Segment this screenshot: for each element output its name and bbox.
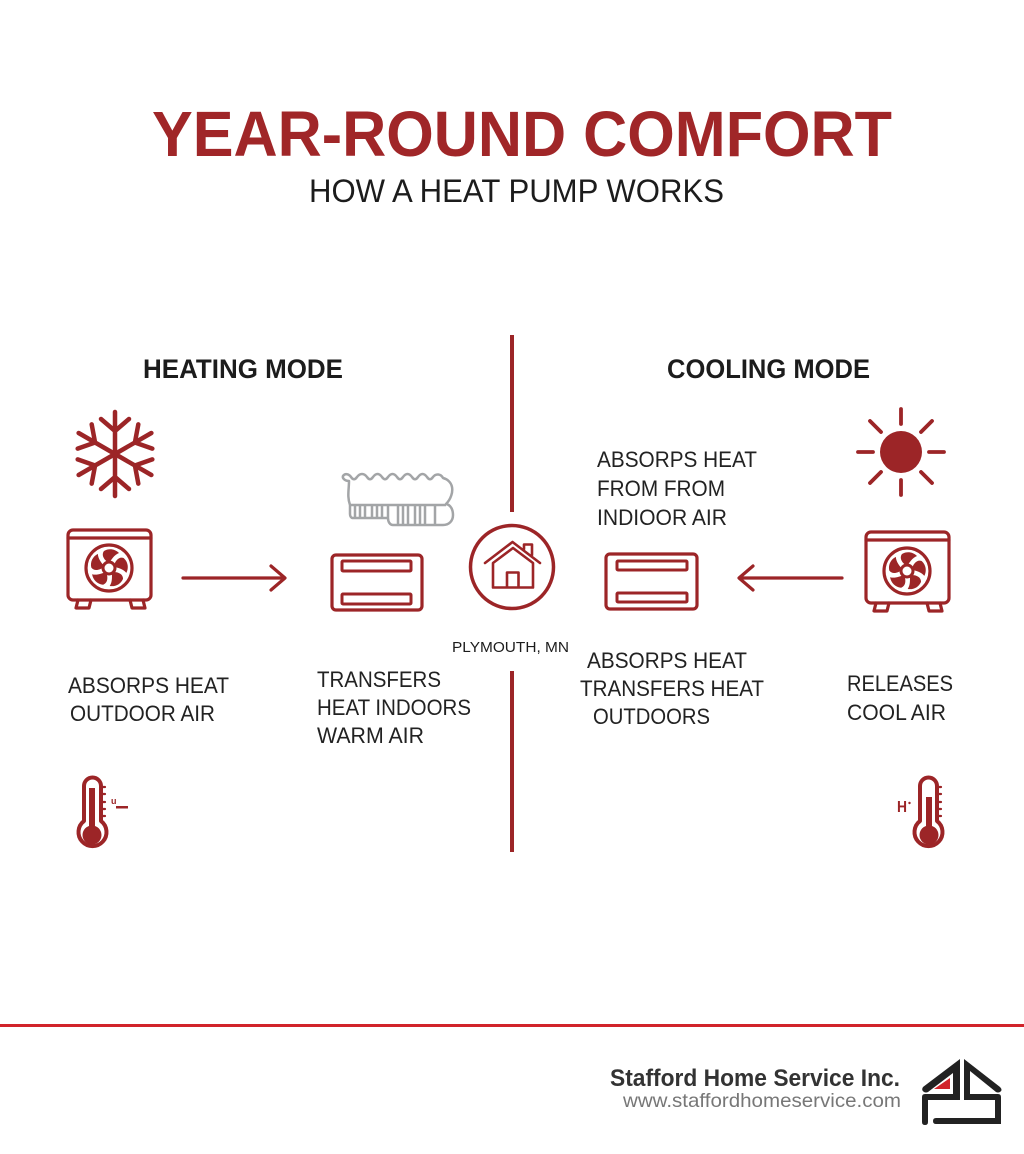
icon: indoor unit left xyxy=(332,555,422,610)
icon: hot thermometer xyxy=(897,778,942,846)
subtitle: HOW A HEAT PUMP WORKS xyxy=(309,173,724,209)
text: cooling indoor absorb xyxy=(597,447,757,530)
text: heating indoor step xyxy=(317,667,471,748)
footer rule xyxy=(0,1024,1024,1027)
icon: grey coil xyxy=(343,474,453,525)
title: YEAR-ROUND COMFORT xyxy=(152,98,892,170)
icon: cold thermometer: u xyxy=(111,796,116,806)
text: cooling release step: COOL AIR xyxy=(847,700,946,725)
text: heating indoor step: TRANSFERS xyxy=(317,667,441,692)
icon: sun xyxy=(858,409,944,495)
center divider xyxy=(510,335,514,852)
location label: PLYMOUTH, MN xyxy=(452,639,569,656)
icon: indoor unit right xyxy=(606,554,697,609)
text: cooling release step xyxy=(847,671,953,725)
text: cooling transfer step: OUTDOORS xyxy=(593,704,710,729)
footer company name: Stafford Home Service Inc. xyxy=(610,1065,900,1092)
text: heating outdoor step: ABSORPS HEAT xyxy=(68,673,229,698)
arrow: heating flow xyxy=(183,566,285,590)
icon: house in circle xyxy=(470,526,554,608)
text: heating outdoor step xyxy=(68,673,229,726)
icon: hot thermometer: H xyxy=(897,799,907,816)
text: heating indoor step: WARM AIR xyxy=(317,723,424,748)
text: cooling indoor absorb: FROM FROM xyxy=(597,476,725,501)
text: cooling release step: RELEASES xyxy=(847,671,953,696)
text: cooling indoor absorb: INDIOOR AIR xyxy=(597,505,727,530)
footer website: www.staffordhomeservice.com xyxy=(622,1090,901,1112)
text: cooling transfer step xyxy=(580,648,764,729)
arrow: cooling flow xyxy=(739,566,842,590)
text: cooling indoor absorb: ABSORPS HEAT xyxy=(597,447,757,472)
icon: cold thermometer xyxy=(78,778,128,846)
heading: heating mode: HEATING MODE xyxy=(143,354,343,384)
heading: cooling mode: COOLING MODE xyxy=(667,354,870,384)
text: heating outdoor step: OUTDOOR AIR xyxy=(70,701,215,726)
icon: outdoor unit left xyxy=(68,530,151,608)
icon: snowflake xyxy=(72,412,158,496)
text: cooling transfer step: ABSORPS HEAT xyxy=(587,648,747,673)
text: cooling transfer step: TRANSFERS HEAT xyxy=(580,676,764,701)
text: heating indoor step: HEAT INDOORS xyxy=(317,695,471,720)
icon: outdoor unit right xyxy=(866,532,949,611)
logo xyxy=(922,1059,1002,1125)
